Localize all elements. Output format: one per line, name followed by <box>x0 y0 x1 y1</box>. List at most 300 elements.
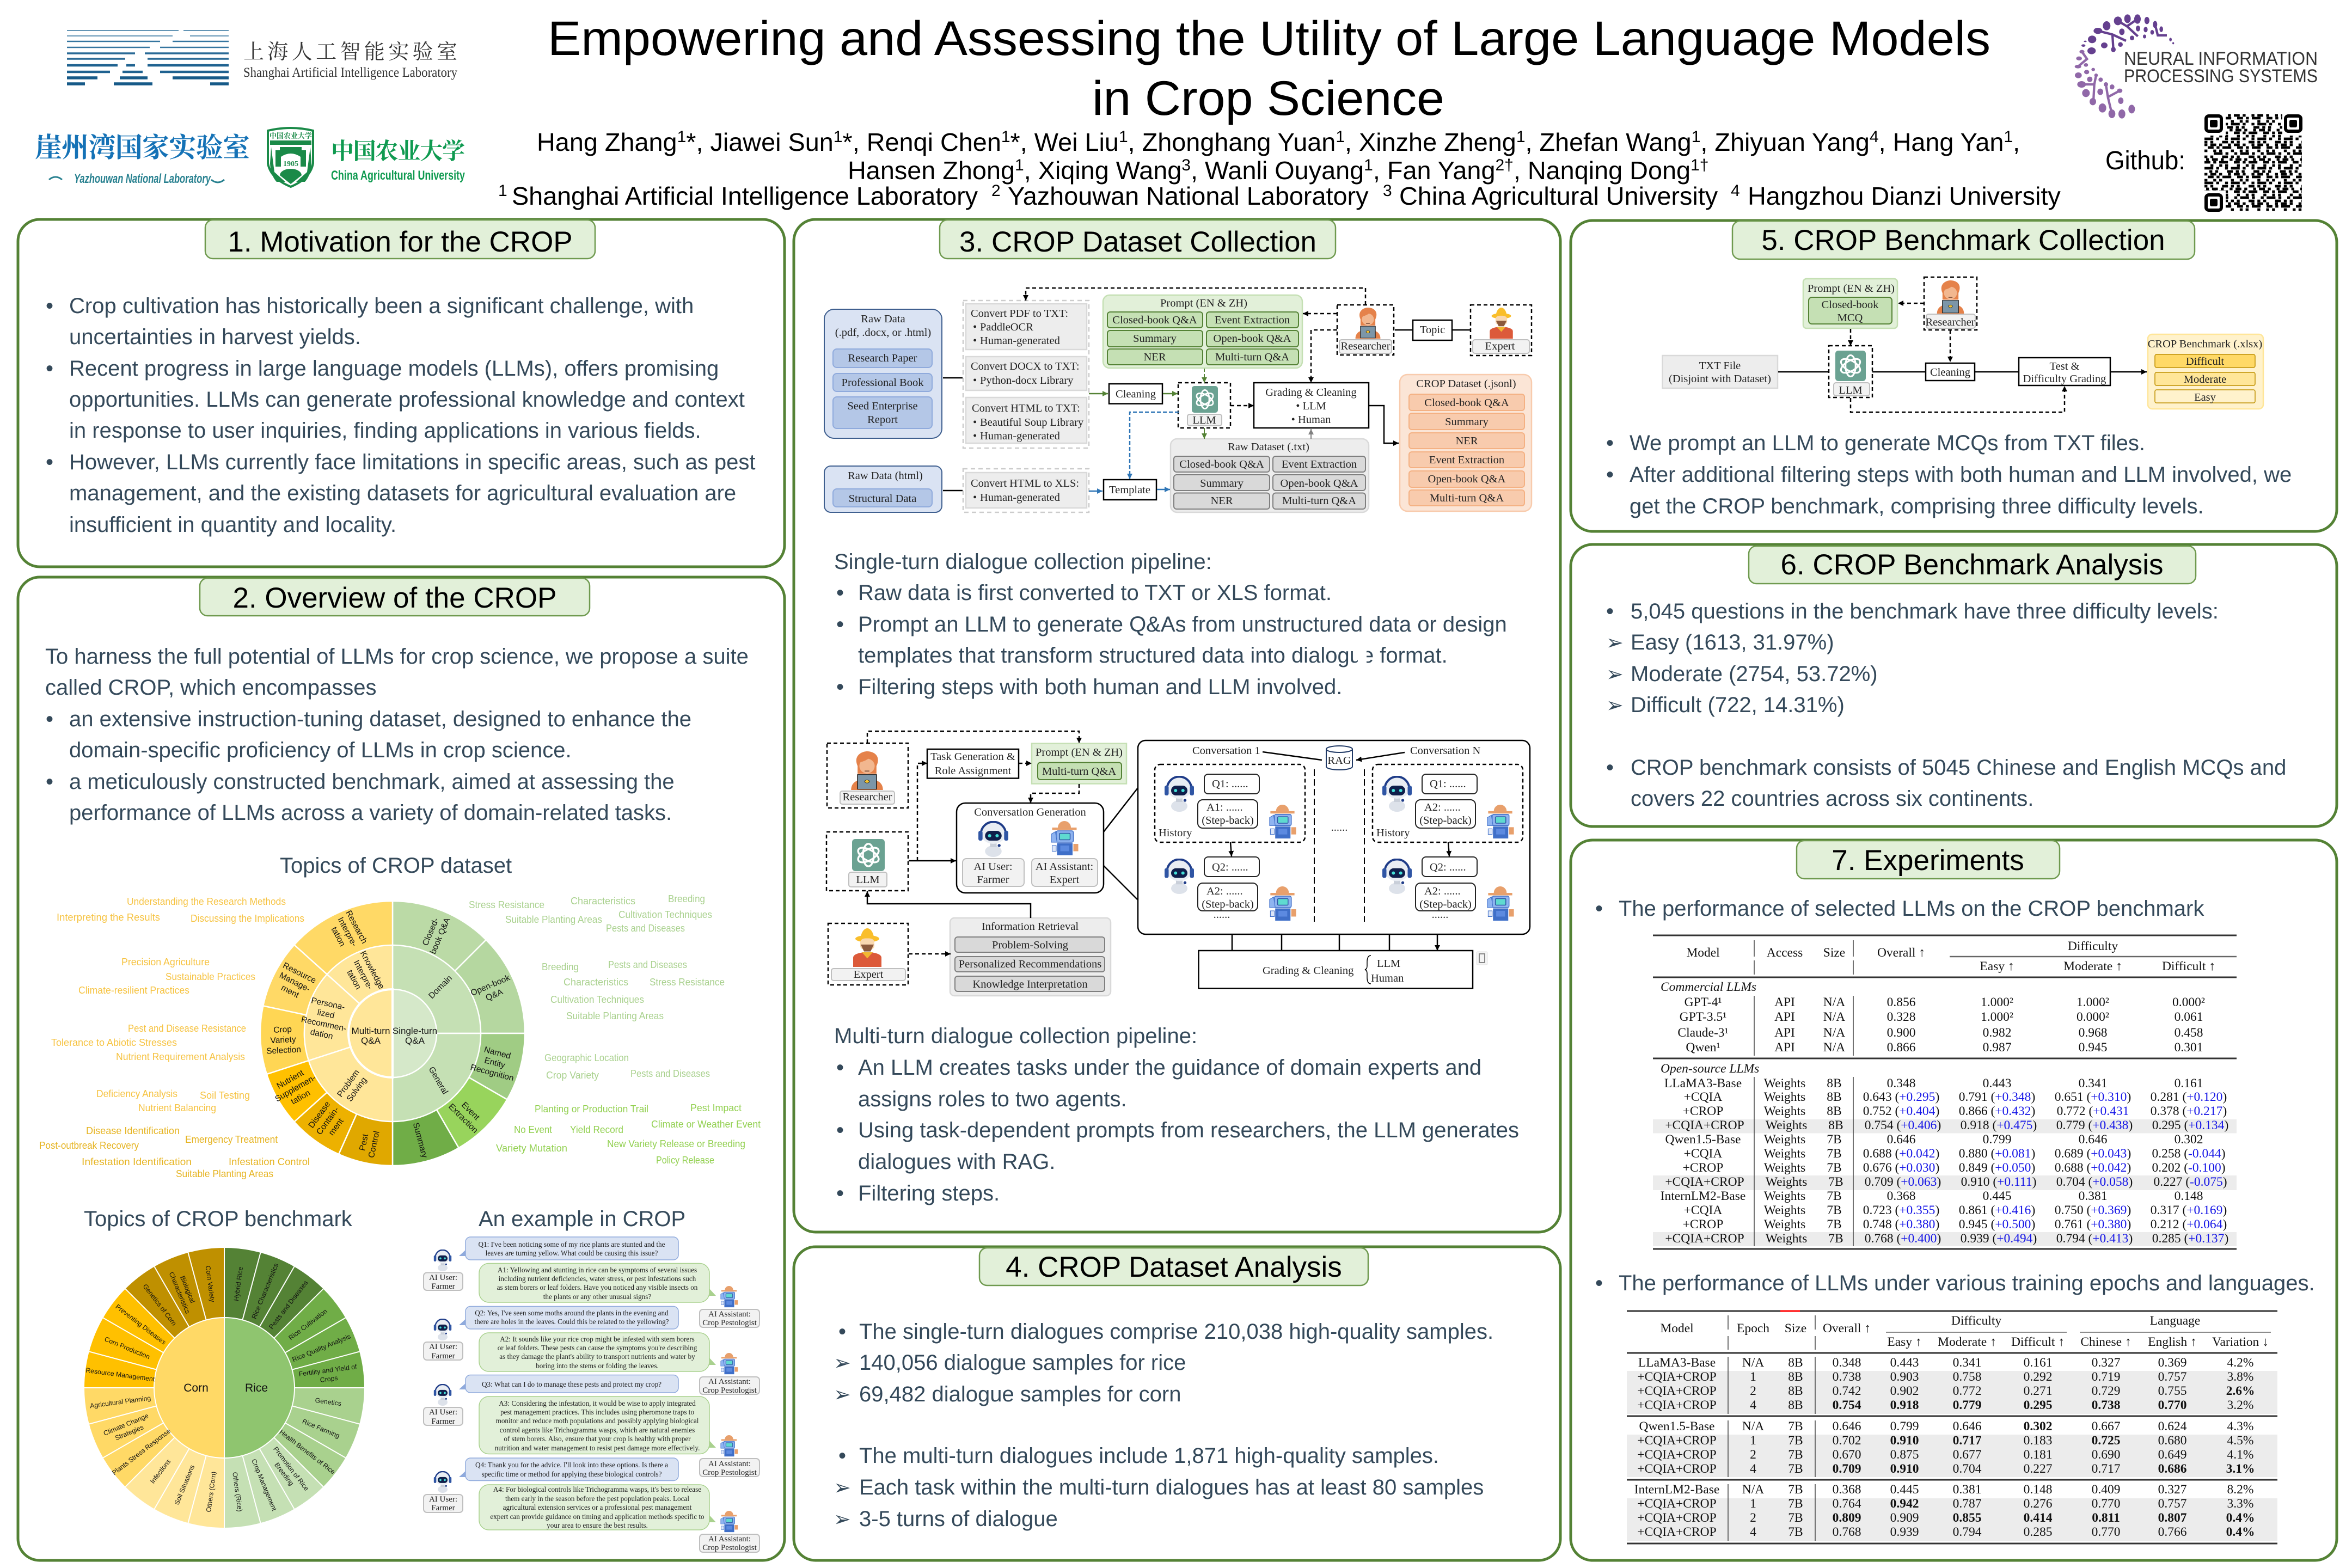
bubble: Q1: Q1: I've been noticing some of my rice plants are stunted and the <box>479 1240 665 1248</box>
table: LLM performance on CROP benchmark: 0.148 <box>2175 1189 2203 1203</box>
table: training epochs and languages: 0.770 <box>2092 1525 2120 1539</box>
text block: benchmark statistics <box>1606 599 2286 811</box>
heading: panel 3: 3. CROP Dataset Collection <box>959 226 1316 258</box>
table: LLM performance on CROP benchmark <box>1653 935 2237 1249</box>
box: information retrieval: Problem-Solving <box>992 939 1068 951</box>
box: CROP dataset: Summary <box>1445 416 1489 428</box>
word cloud: multi-turn topics: Discussing the Implications <box>191 913 304 924</box>
box: information retrieval <box>950 918 1111 996</box>
table: training epochs and languages: 0.443 <box>1890 1356 1919 1370</box>
table: training epochs and languages: 0.271 <box>2024 1384 2052 1398</box>
text block: multi-turn pipeline: Multi-turn dialogue collection pipeline: <box>834 1024 1197 1048</box>
icon: LLM <box>1178 383 1230 428</box>
sunburst segment labels: Pest <box>358 1133 370 1152</box>
table: training epochs and languages: 0.942 <box>1890 1497 1919 1511</box>
authors: Yazhouwan National Laboratory <box>1008 182 1369 210</box>
box: grading and cleaning <box>1199 951 1473 989</box>
AI user farmers: Farmer <box>431 1352 455 1361</box>
text block: multi-turn pipeline <box>834 1024 1519 1205</box>
logo: Yazhouwan National Laboratory <box>35 132 250 186</box>
table: LLM performance on CROP benchmark: 0.866 <box>1887 1040 1916 1055</box>
heading: panel 7 <box>1797 841 2060 879</box>
table: LLM performance on CROP benchmark: 0.900 <box>1887 1026 1915 1040</box>
sunburst segment labels: Solving <box>345 1076 369 1104</box>
word cloud: single-turn topics: Breeding <box>542 961 579 972</box>
authors: 1 <box>1001 128 1010 146</box>
bubble: Q1: leaves are turning yellow. What could be causing this issue? <box>486 1249 658 1257</box>
table: training epochs and languages: 0.725 <box>2092 1434 2120 1448</box>
text block: benchmark collection: • <box>1606 463 1614 487</box>
authors: 1 <box>1364 156 1373 174</box>
sunburst segment labels: Interpre- <box>335 916 359 948</box>
sunburst segment labels: tation <box>290 1088 312 1107</box>
table: LLM performance on CROP benchmark: 0.987 <box>1983 1040 2012 1055</box>
authors: 1 <box>1692 128 1700 146</box>
box: CROP benchmark: Easy <box>2194 391 2216 403</box>
text block: multi-turn pipeline: dialogues with RAG. <box>858 1150 1055 1174</box>
table: LLM performance on CROP benchmark: 0.000² <box>2172 995 2205 1009</box>
table: LLM performance on CROP benchmark: API <box>1774 1010 1795 1024</box>
table: training epochs and languages: 0.910 <box>1890 1434 1919 1448</box>
box: prompt: Open-book Q&A <box>1214 333 1291 345</box>
sunburst segment labels: Entity <box>483 1056 506 1070</box>
panel: 6. CROP Benchmark Analysis <box>1571 544 2337 826</box>
box: conversation generation <box>957 803 1104 893</box>
icon: RAG database: RAG <box>1327 755 1351 767</box>
sunburst segment labels: Selection <box>266 1045 301 1056</box>
text block: dataset statistics: • <box>838 1444 846 1468</box>
box: grading and cleaning: Human <box>1371 972 1404 984</box>
authors <box>498 128 2061 210</box>
icon: LLM: LLM <box>1839 384 1863 396</box>
box: task generation: Task Generation & <box>930 751 1015 763</box>
table: training epochs and languages: +CQIA+CROP <box>1637 1384 1717 1398</box>
table: training epochs and languages: 0.742 <box>1833 1384 1861 1398</box>
box: conversion steps <box>963 301 1089 448</box>
box: conversion steps: Human-generated <box>980 335 1060 347</box>
table: training epochs and languages: 0.381 <box>1953 1483 1981 1497</box>
text block: benchmark statistics: Easy (1613, 31.97%) <box>1631 630 1834 654</box>
table: training epochs and languages: 0.779 <box>1953 1398 1981 1412</box>
table: LLM performance on CROP benchmark: 0.754 (+0.406) <box>1865 1118 1941 1132</box>
table: training epochs and languages: 0.670 <box>1833 1448 1861 1462</box>
table: training epochs and languages: 4 <box>1750 1525 1756 1539</box>
text block: dataset statistics: ➢ <box>834 1475 851 1499</box>
panel: 5. CROP Benchmark Collection <box>1571 220 2337 531</box>
benchmark segment labels <box>85 1262 359 1512</box>
table: LLM performance on CROP benchmark: 8B <box>1827 1090 1842 1104</box>
logo: China Agricultural University: 中国农业大学 <box>331 138 465 164</box>
table: training epochs and languages: +CQIA+CROP <box>1637 1434 1717 1448</box>
table: LLM performance on CROP benchmark: 0.368 <box>1887 1189 1915 1203</box>
table: training epochs and languages: English ↑ <box>2148 1335 2197 1349</box>
table: LLM performance on CROP benchmark: 0.799 <box>1983 1132 2011 1147</box>
table: training epochs and languages: 0.704 <box>1953 1462 1982 1476</box>
table: training epochs and languages: 8B <box>1788 1398 1803 1412</box>
word cloud: single-turn topics: Climate or Weather Event <box>651 1119 761 1130</box>
conversation 1: (Step-back) <box>1202 814 1254 826</box>
box: raw dataset: Closed-book Q&A <box>1179 458 1264 470</box>
text block: single-turn pipeline: Single-turn dialogue collection pipeline: <box>834 550 1212 574</box>
arrows: multi-turn connectors <box>867 731 1437 954</box>
table: training epochs and languages: 0.302 <box>2024 1419 2052 1434</box>
authors: , Hang Yan <box>1879 128 2004 156</box>
sunburst segment labels: ment <box>279 983 301 1000</box>
benchmark segment labels: Fertility and Yield of <box>298 1363 357 1378</box>
emblem: CAU shield: 中国农业大学 <box>270 132 312 140</box>
table: LLM performance on CROP benchmark: 0.982 <box>1983 1026 2011 1040</box>
text block: motivation bullets: in response to user inquiries, finding applications in various fields. <box>69 419 701 443</box>
authors: 1 <box>1336 128 1345 146</box>
table: training epochs and languages: 4.2% <box>2227 1356 2253 1370</box>
table: training epochs and languages: 0.757 <box>2158 1370 2187 1384</box>
panel: 1. Motivation for the CROP <box>18 219 785 567</box>
authors: China Agricultural University <box>1399 182 1718 210</box>
box: conversion steps: Convert DOCX to TXT: <box>971 360 1080 372</box>
table: LLM performance on CROP benchmark: Difficult ↑ <box>2162 959 2215 973</box>
text block: motivation bullets: Crop cultivation has historically been a significant challenge, with <box>69 294 694 318</box>
title: Empowering and Assessing the Utility of Large Language Models <box>548 11 1990 65</box>
sunburst chart: topics of CROP benchmark: Corn <box>183 1382 209 1394</box>
sunburst segment labels: Closed- <box>421 917 440 947</box>
bubble: A3 <box>479 1396 716 1454</box>
table: LLM performance on CROP benchmark: Qwen1.5-Base <box>1665 1132 1741 1147</box>
text block: multi-turn pipeline: • <box>836 1181 844 1205</box>
table: LLM performance on CROP benchmark: 0.227 (-0.075) <box>2153 1175 2227 1189</box>
sunburst segment labels: General <box>427 1065 450 1096</box>
benchmark segment labels: Pests and Diseases <box>267 1279 309 1331</box>
table: training epochs and languages: Language <box>2150 1314 2200 1328</box>
bubble: A3: of stem borers. Also, ensure that your crop is healthy with proper <box>504 1435 691 1443</box>
sunburst segment labels: Variety <box>270 1035 296 1045</box>
box: TXT file <box>1663 356 1778 388</box>
box: grading and cleaning: Grading & Cleaning <box>1265 387 1357 399</box>
table: LLM performance on CROP benchmark: +CROP <box>1683 1104 1723 1118</box>
box: grading and cleaning: • LLM <box>1296 400 1326 412</box>
table: training epochs and languages: N/A <box>1742 1356 1764 1370</box>
table: LLM performance on CROP benchmark: Commercial LLMs <box>1661 980 1756 994</box>
table: LLM performance on CROP benchmark: 0.212 (+0.064) <box>2151 1217 2227 1232</box>
table: training epochs and languages: 0.719 <box>2092 1370 2120 1384</box>
box: conversion steps: • <box>973 321 977 333</box>
sunburst segment labels: Q&A <box>361 1036 381 1046</box>
table: LLM performance on CROP benchmark: Weights <box>1764 1076 1805 1091</box>
table: training epochs and languages: 7B <box>1788 1448 1803 1462</box>
benchmark segment labels: Corn Production <box>103 1335 151 1361</box>
box: conversation generation: AI Assistant: <box>1036 861 1093 873</box>
table: LLM performance on CROP benchmark: 0.761 (+0.380) <box>2055 1217 2131 1232</box>
table: training epochs and languages: 0.757 <box>2158 1497 2187 1511</box>
word cloud: single-turn topics: Suitable Planting Areas <box>566 1010 664 1021</box>
box: CROP dataset: Closed-book Q&A <box>1424 397 1509 409</box>
sunburst segment labels: Named <box>483 1045 512 1061</box>
benchmark segment labels: Crops <box>320 1374 338 1384</box>
table: LLM performance on CROP benchmark: 0.880 (+0.081) <box>1959 1147 2035 1161</box>
text block: motivation bullets: However, LLMs currently face limitations in specific areas, such as pest <box>69 450 756 474</box>
table: LLM performance on CROP benchmark: 7B <box>1828 1232 1843 1246</box>
table: training epochs and languages: 0.794 <box>1953 1525 1982 1539</box>
bubble: A1: the plants or any other unusual signs? <box>543 1293 651 1301</box>
sunburst segment labels: Persona- <box>310 996 346 1012</box>
box: convert html to xls: • <box>973 492 977 504</box>
sunburst segment labels: Contain- <box>315 1105 341 1137</box>
bubble: A3: control agents like Trichogramma wasps, which are natural enemies <box>500 1426 695 1434</box>
text block: benchmark collection: We prompt an LLM to generate MCQs from TXT files. <box>1630 431 2145 455</box>
table: training epochs and languages: 0.327 <box>2158 1483 2187 1497</box>
word cloud: multi-turn topics: Soil Testing <box>200 1090 250 1101</box>
table: training epochs and languages: 0.148 <box>2024 1483 2052 1497</box>
benchmark segment labels: Crop Management <box>250 1458 278 1512</box>
table: training epochs and languages: 1 <box>1750 1497 1756 1511</box>
box: convert html to xls: Human-generated <box>980 492 1060 504</box>
table: LLM performance on CROP benchmark: 0.723 (+0.355) <box>1863 1203 1939 1217</box>
box: prompt <box>1032 744 1126 784</box>
authors: 2 <box>991 182 1001 200</box>
bubble: A3: pest management practices. This includes using pheromone traps to <box>500 1408 694 1416</box>
table: LLM performance on CROP benchmark: Weights <box>1764 1090 1805 1104</box>
box: prompt: Prompt (EN & ZH) <box>1160 297 1247 309</box>
sunburst segment labels: Event <box>460 1100 481 1122</box>
panel: 4. CROP Dataset Analysis <box>794 1247 1560 1560</box>
conversation 1: Q1: ...... <box>1212 778 1248 790</box>
table: training epochs and languages: 0.918 <box>1890 1398 1919 1412</box>
table: LLM performance on CROP benchmark: 8B <box>1828 1118 1843 1132</box>
AI assistant crop pestologists: Crop Pestologist <box>702 1468 757 1477</box>
benchmark segment labels: Genetics <box>315 1396 342 1407</box>
table: LLM performance on CROP benchmark: +CROP <box>1683 1217 1723 1232</box>
text block: benchmark collection: After additional filtering steps with both human and LLM involved, we <box>1630 463 2292 487</box>
table: LLM performance on CROP benchmark: Weights <box>1764 1132 1805 1147</box>
benchmark segment labels: Others (Corn) <box>205 1471 218 1512</box>
box: CROP benchmark: CROP Benchmark (.xlsx) <box>2148 338 2262 350</box>
bubble: A2: as they damage the plant's ability to transport nutrients and water by <box>499 1352 695 1361</box>
sunburst segment labels: Interpre- <box>351 959 375 991</box>
sunburst segment labels: ment <box>327 1117 346 1137</box>
table: training epochs and languages: 0.811 <box>2092 1511 2120 1525</box>
box: prompt: Event Extraction <box>1215 314 1290 326</box>
logo: Yazhouwan National Laboratory: 崖州湾国家实验室 <box>35 132 250 163</box>
conversation 1: A2: ...... <box>1206 885 1243 897</box>
AI assistant crop pestologists: AI Assistant: <box>708 1310 751 1319</box>
bubble: Q3 <box>459 1375 678 1393</box>
box: raw dataset <box>1171 439 1369 512</box>
table: LLM performance on CROP benchmark: Moderate ↑ <box>2063 959 2122 973</box>
table: training epochs and languages: 0.772 <box>1953 1384 1981 1398</box>
AI assistant crop pestologists: AI Assistant: <box>708 1377 751 1386</box>
logo: Shanghai AI Laboratory: 上海人工智能实验室 <box>243 41 457 64</box>
text block: multi-turn pipeline: An LLM creates tasks under the guidance of domain experts and <box>858 1056 1481 1080</box>
box: prompt: Closed-book Q&A <box>1112 314 1197 326</box>
table: LLM performance on CROP benchmark: 0.794 (+0.413) <box>2056 1232 2133 1246</box>
word cloud: single-turn topics: Cultivation Techniques <box>618 909 712 920</box>
chart heading: topics of dataset: Topics of CROP dataset <box>280 854 512 878</box>
sunburst segment labels: Resource <box>281 961 317 985</box>
box: template <box>1104 480 1156 500</box>
icon: expert <box>828 923 908 985</box>
table: training epochs and languages: 8B <box>1788 1356 1803 1370</box>
table: LLM performance on CROP benchmark: 7B <box>1828 1175 1843 1189</box>
authors: *, Renqi Chen <box>842 128 1001 156</box>
bubble: A1 <box>479 1263 716 1302</box>
AI assistant crop pestologists: AI Assistant: <box>708 1535 751 1543</box>
box: raw data documents: Report <box>867 414 898 426</box>
box: prompt: Closed-book <box>1822 299 1879 311</box>
word cloud: multi-turn topics: Emergency Treatment <box>185 1134 278 1145</box>
word cloud: single-turn topics: Policy Release <box>656 1155 714 1166</box>
box: grading and cleaning <box>1254 383 1369 428</box>
authors: 1 <box>1015 156 1024 174</box>
text block: dataset statistics: ➢ <box>834 1351 851 1375</box>
panel: 7. Experiments <box>1571 840 2337 1560</box>
benchmark segment labels: Resource Management <box>85 1367 156 1383</box>
benchmark segment labels: Corn Variety <box>204 1265 216 1303</box>
box: raw dataset: Raw Dataset (.txt) <box>1228 441 1309 453</box>
word cloud: multi-turn topics: Suitable Planting Areas <box>176 1168 273 1179</box>
authors: Hang Zhang <box>537 128 677 156</box>
AI assistant crop pestologists: Crop Pestologist <box>702 1543 757 1552</box>
box: CROP dataset: Multi-turn Q&A <box>1430 492 1504 504</box>
benchmark segment labels: Others (Rice) <box>231 1472 244 1512</box>
table: training epochs and languages: 0.295 <box>2024 1398 2052 1412</box>
box: TXT file: (Disjoint with Dataset) <box>1669 373 1771 385</box>
table: LLM performance on CROP benchmark: 0.348 <box>1887 1076 1915 1091</box>
sunburst segment labels: Supplemen- <box>273 1073 317 1104</box>
box: conversion steps: Beautiful Soup Library <box>980 416 1084 428</box>
box: test and difficulty grading <box>2019 358 2110 385</box>
sunburst segment labels: Extraction <box>446 1102 480 1135</box>
table: training epochs and languages: 0.738 <box>1833 1370 1861 1384</box>
text block: motivation bullets: management, and the existing datasets for agricultural evaluation are <box>69 481 736 505</box>
table: LLM performance on CROP benchmark: 0.000² <box>2077 1010 2109 1024</box>
table: training epochs and languages: 3.3% <box>2227 1497 2253 1511</box>
AI user farmers: Farmer <box>431 1282 455 1291</box>
bubble: A4 <box>479 1485 716 1530</box>
chart heading: example: An example in CROP <box>479 1207 685 1231</box>
table: training epochs and languages: 0.686 <box>2158 1462 2187 1476</box>
box: cleaning <box>1926 363 1975 381</box>
box: prompt: MCQ <box>1837 312 1863 324</box>
text block: motivation bullets: • <box>46 294 53 318</box>
heading: panel 4: 4. CROP Dataset Analysis <box>1006 1251 1342 1283</box>
authors: 1 <box>2004 128 2013 146</box>
table: training epochs and languages: 1 <box>1750 1370 1756 1384</box>
table: LLM performance on CROP benchmark: Weights <box>1764 1203 1805 1217</box>
word cloud: multi-turn topics: Precision Agriculture <box>121 957 210 967</box>
icon: LLM: LLM <box>1192 414 1216 426</box>
icon: researcher: Researcher <box>1925 316 1975 328</box>
table: LLM performance on CROP benchmark: Open-source LLMs <box>1661 1062 1759 1076</box>
box: CROP dataset: Open-book Q&A <box>1428 473 1506 485</box>
table: LLM performance on CROP benchmark: Weights <box>1764 1217 1805 1232</box>
authors: 1† <box>1690 156 1708 174</box>
benchmark segment labels: Infections <box>149 1457 172 1485</box>
table: LLM performance on CROP benchmark: Weights <box>1766 1175 1807 1189</box>
table: training epochs and languages: 8B <box>1788 1384 1803 1398</box>
conversation 1: ...... <box>1214 909 1230 921</box>
table: LLM performance on CROP benchmark: N/A <box>1823 995 1845 1009</box>
table: training epochs and languages: 0.369 <box>2158 1356 2186 1370</box>
conversation N: Q2: ...... <box>1430 861 1466 873</box>
text block: motivation bullets: opportunities. LLMs can generate professional knowledge and context <box>69 388 745 412</box>
word cloud: multi-turn topics: Nutrient Requirement Analysis <box>116 1051 245 1062</box>
table: training epochs and languages: 0.909 <box>1890 1511 1919 1525</box>
authors: , Xiqing Wang <box>1024 156 1181 185</box>
word cloud: single-turn topics: Yield Record <box>570 1124 623 1135</box>
table: training epochs and languages: 0.902 <box>1890 1384 1919 1398</box>
word cloud: multi-turn topics: Disease Identification <box>86 1125 180 1136</box>
bubble: A4: A4: For biological controls like Trichogramma wasps, it's best to release <box>493 1485 701 1493</box>
heading: panel 1: 1. Motivation for the CROP <box>228 226 573 258</box>
table: LLM performance on CROP benchmark: Overall ↑ <box>1877 946 1925 960</box>
table: LLM performance on CROP benchmark: +CQIA <box>1684 1203 1722 1217</box>
box: CROP dataset: NER <box>1456 435 1478 447</box>
logo: China Agricultural University: China Agricultural University <box>331 168 465 183</box>
sunburst segment labels: Research <box>344 909 369 945</box>
table: training epochs and languages: 8.2% <box>2227 1483 2253 1497</box>
heading: panel 2: 2. Overview of the CROP <box>233 582 556 614</box>
table: LLM performance on CROP benchmark: 0.381 <box>2079 1189 2107 1203</box>
table: LLM performance on CROP benchmark: 0.445 <box>1983 1189 2011 1203</box>
text block: benchmark statistics: Moderate (2754, 53.72%) <box>1631 662 1878 686</box>
word cloud: multi-turn topics: Infestation Control <box>229 1156 310 1167</box>
table: training epochs and languages: 0.677 <box>1953 1448 1982 1462</box>
authors: Hangzhou Dianzi University <box>1748 182 2061 210</box>
authors: 3 <box>1181 156 1191 174</box>
box: test and difficulty grading: Difficulty Grading <box>2023 373 2106 385</box>
box: conversion steps: Human-generated <box>980 430 1060 442</box>
table: LLM performance on CROP benchmark: Weights <box>1764 1189 1805 1203</box>
word cloud: multi-turn topics: Post-outbreak Recovery <box>39 1140 139 1151</box>
bubble: Q1 <box>459 1237 678 1260</box>
table: training epochs and languages: 0.646 <box>1953 1419 1982 1434</box>
box: information retrieval: Information Retrieval <box>982 921 1079 933</box>
box: raw dataset: Event Extraction <box>1282 458 1357 470</box>
box: topic: Topic <box>1420 324 1445 336</box>
chart heading: topics of benchmark: Topics of CROP benchmark <box>84 1207 353 1231</box>
conversation N: (Step-back) <box>1419 814 1472 826</box>
bubble: A2: A2: It sounds like your rice crop might be infested with stem borers <box>500 1335 695 1343</box>
box: prompt: Summary <box>1133 333 1177 345</box>
table: LLM performance on CROP benchmark: 0.301 <box>2175 1040 2203 1055</box>
table: training epochs and languages: 0.758 <box>1953 1370 1981 1384</box>
conversation N: A2: ...... <box>1424 801 1461 813</box>
table: LLM performance on CROP benchmark: Model <box>1686 946 1720 960</box>
table: training epochs and languages: 0.807 <box>2158 1511 2187 1525</box>
bubble: A3: monitor and reduce moth populations and possibly applying biological <box>496 1417 699 1425</box>
table: training epochs and languages: 0.702 <box>1833 1434 1861 1448</box>
table: LLM performance on CROP benchmark: 7B <box>1827 1203 1842 1217</box>
diagram: multi-turn pipeline <box>826 731 1530 996</box>
AI assistant crop pestologists: Crop Pestologist <box>702 1319 757 1327</box>
box: conversion steps: • <box>973 335 977 347</box>
sunburst segment labels: Manage- <box>278 971 311 994</box>
table: training epochs and languages: 0.161 <box>2024 1356 2052 1370</box>
table: LLM performance on CROP benchmark: N/A <box>1823 1010 1845 1024</box>
table: LLM performance on CROP benchmark: 0.689 (+0.043) <box>2055 1147 2131 1161</box>
sunburst segment labels: Problem <box>335 1068 362 1099</box>
text block: benchmark collection: • <box>1606 431 1614 455</box>
text block: overview: domain-specific proficiency of LLMs in crop science. <box>69 738 572 762</box>
table: training epochs and languages: Chinese ↑ <box>2080 1335 2132 1349</box>
table: training epochs and languages: Moderate ↑ <box>1938 1335 1996 1349</box>
text block: benchmark collection: get the CROP benchmark, comprising three difficulty levels. <box>1630 494 2204 518</box>
table: training epochs and languages: 2 <box>1750 1384 1756 1398</box>
table: training epochs and languages: 7B <box>1788 1483 1803 1497</box>
text block: dataset statistics: ➢ <box>834 1507 851 1531</box>
conversation 1 <box>1155 764 1305 921</box>
icon: LLM: LLM <box>856 874 880 886</box>
table: training epochs and languages: 0.717 <box>1953 1434 1982 1448</box>
